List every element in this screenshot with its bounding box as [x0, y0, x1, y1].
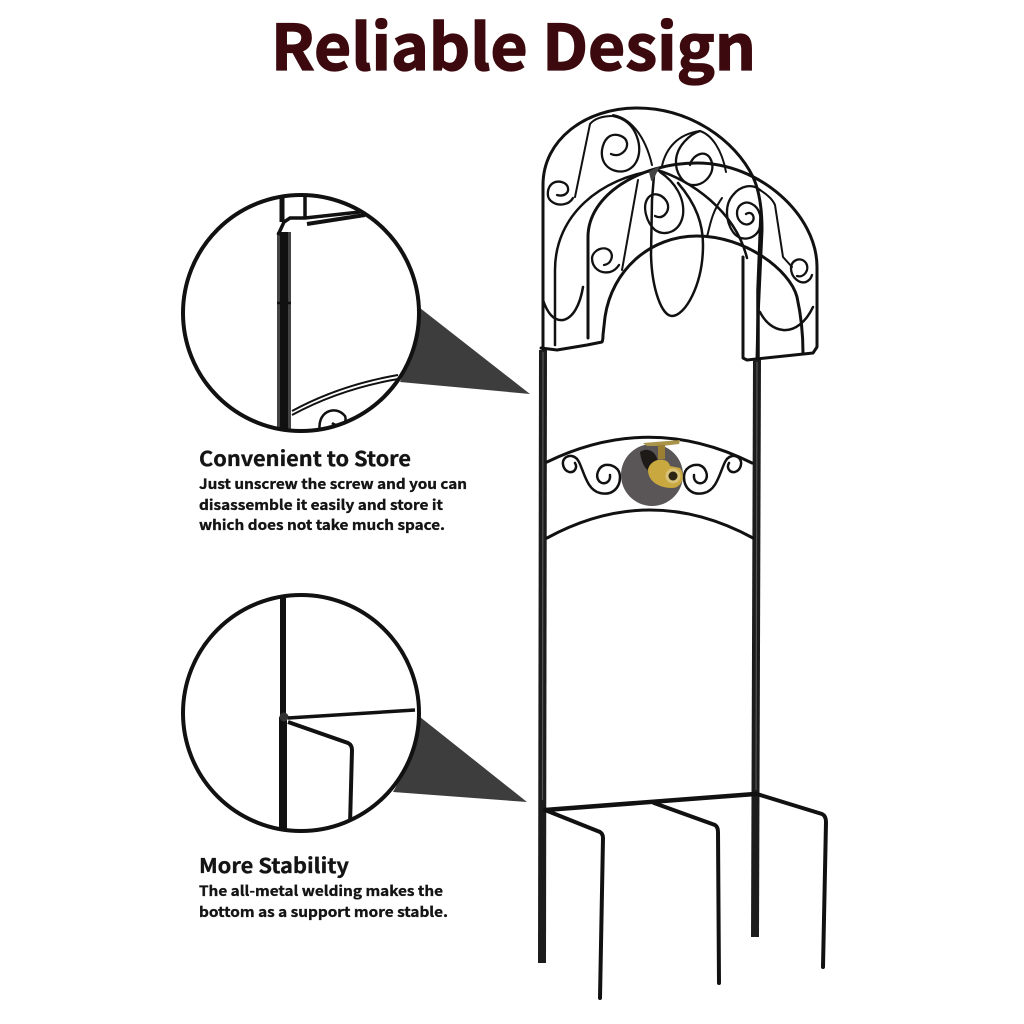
pointer wedge: store detail [400, 308, 530, 394]
title: Reliable Design [271, 0, 756, 89]
bottom wrought iron band [547, 510, 753, 538]
magnifier ring: stability detail [183, 595, 419, 831]
text block: convenient to store: Convenient to Store [199, 442, 411, 472]
magnified joint: stability detail [280, 593, 415, 833]
text block: convenient to store [199, 442, 467, 535]
text block: more stability: The all-metal welding makes the [199, 881, 443, 901]
top wrought iron band [547, 437, 752, 463]
faucet plate [621, 444, 683, 506]
magnified joint: store detail [277, 194, 398, 435]
left and right posts [542, 350, 757, 963]
hose holder stand [541, 108, 826, 998]
back arch [543, 108, 762, 360]
crossbar and ground legs [545, 794, 826, 998]
detail callout: more stability [183, 593, 527, 833]
text block: more stability: bottom as a support more stable. [199, 902, 448, 922]
brass faucet [640, 440, 683, 488]
decorative scroll: right [684, 456, 741, 494]
magnifier ring: store detail [183, 195, 419, 431]
text block: convenient to store: disassemble it easily and store it [199, 495, 443, 515]
text block: convenient to store: which does not take much space. [199, 515, 445, 535]
pointer wedge: stability detail [393, 717, 527, 802]
text block: more stability [199, 849, 448, 922]
detail callout: convenient to store [183, 194, 530, 435]
text block: more stability: More Stability [199, 849, 349, 879]
decorative scroll: left [563, 456, 620, 494]
text block: convenient to store: Just unscrew the screw and you can [199, 474, 467, 494]
front arch [541, 163, 817, 360]
